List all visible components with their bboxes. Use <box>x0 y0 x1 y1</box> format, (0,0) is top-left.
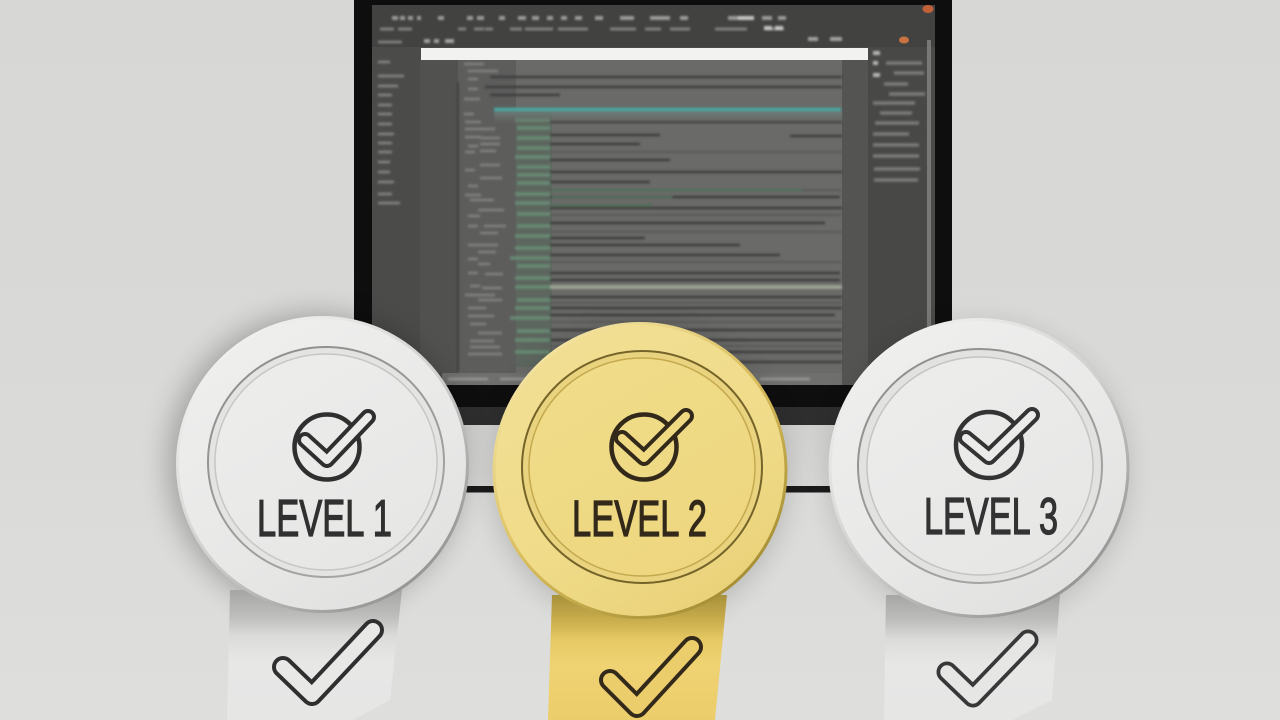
minimap panel <box>842 60 868 385</box>
medal face <box>215 354 437 570</box>
level label: LEVEL 3 <box>924 488 1058 546</box>
check badge icon <box>612 414 686 480</box>
check badge icon <box>294 414 368 480</box>
code dark stripes <box>485 77 842 362</box>
green code run <box>552 190 802 205</box>
right panel <box>868 47 925 385</box>
search bar text <box>427 52 520 55</box>
toolbar icons <box>392 16 786 20</box>
ribbon <box>548 595 727 720</box>
status strip detail <box>448 378 810 380</box>
highlighted light line <box>550 285 842 289</box>
teal highlighted line <box>494 108 841 111</box>
code mid stripes <box>550 152 842 346</box>
screen base <box>372 5 935 385</box>
left sidebar <box>372 47 420 373</box>
right panel entries <box>873 63 925 180</box>
monitor bezel <box>354 0 952 425</box>
code lines column one <box>464 64 506 354</box>
scrollbar <box>927 40 931 373</box>
ribbon <box>227 590 402 720</box>
level label: LEVEL 1 <box>257 490 392 548</box>
white dots in right panel <box>873 53 880 75</box>
medal ring <box>208 347 444 577</box>
toolbar <box>372 5 935 47</box>
medal level 1 <box>168 314 468 720</box>
medal face <box>529 358 755 576</box>
medal rim <box>178 318 468 612</box>
gutter markers <box>457 82 459 372</box>
toolbar second row <box>380 28 784 30</box>
medal shadow <box>494 328 786 624</box>
ribbon <box>884 595 1060 720</box>
medal shadow <box>168 314 464 614</box>
medal ring <box>522 351 762 583</box>
stand base line <box>440 486 832 492</box>
screen <box>372 5 935 385</box>
monitor <box>354 0 952 492</box>
code lines column two <box>510 120 550 352</box>
toolbar bright buttons <box>738 18 783 28</box>
close button <box>922 5 934 13</box>
code tint column <box>516 112 552 367</box>
medal rim <box>494 324 786 618</box>
level label: LEVEL 2 <box>572 490 707 547</box>
tabs <box>424 39 842 41</box>
ribbon check <box>947 640 1028 697</box>
medal rim <box>830 320 1128 616</box>
code area <box>516 60 842 373</box>
ribbon check <box>283 630 373 695</box>
search bar <box>421 48 868 60</box>
orange status dot <box>899 36 909 44</box>
medal level 2 <box>494 324 786 720</box>
medal level 3 <box>830 320 1128 720</box>
check badge icon <box>956 412 1032 478</box>
editor gutter <box>420 60 458 373</box>
teal glow <box>494 112 842 124</box>
medal face <box>867 357 1093 575</box>
bottom status strip <box>442 373 842 385</box>
code left column <box>458 60 516 373</box>
ribbon check <box>610 647 692 707</box>
screen details <box>378 18 925 379</box>
sidebar entries <box>378 42 404 203</box>
monitor stand <box>440 425 840 487</box>
medal ring <box>858 349 1102 583</box>
bezel chin <box>354 407 952 425</box>
medal shadow <box>831 326 1127 622</box>
